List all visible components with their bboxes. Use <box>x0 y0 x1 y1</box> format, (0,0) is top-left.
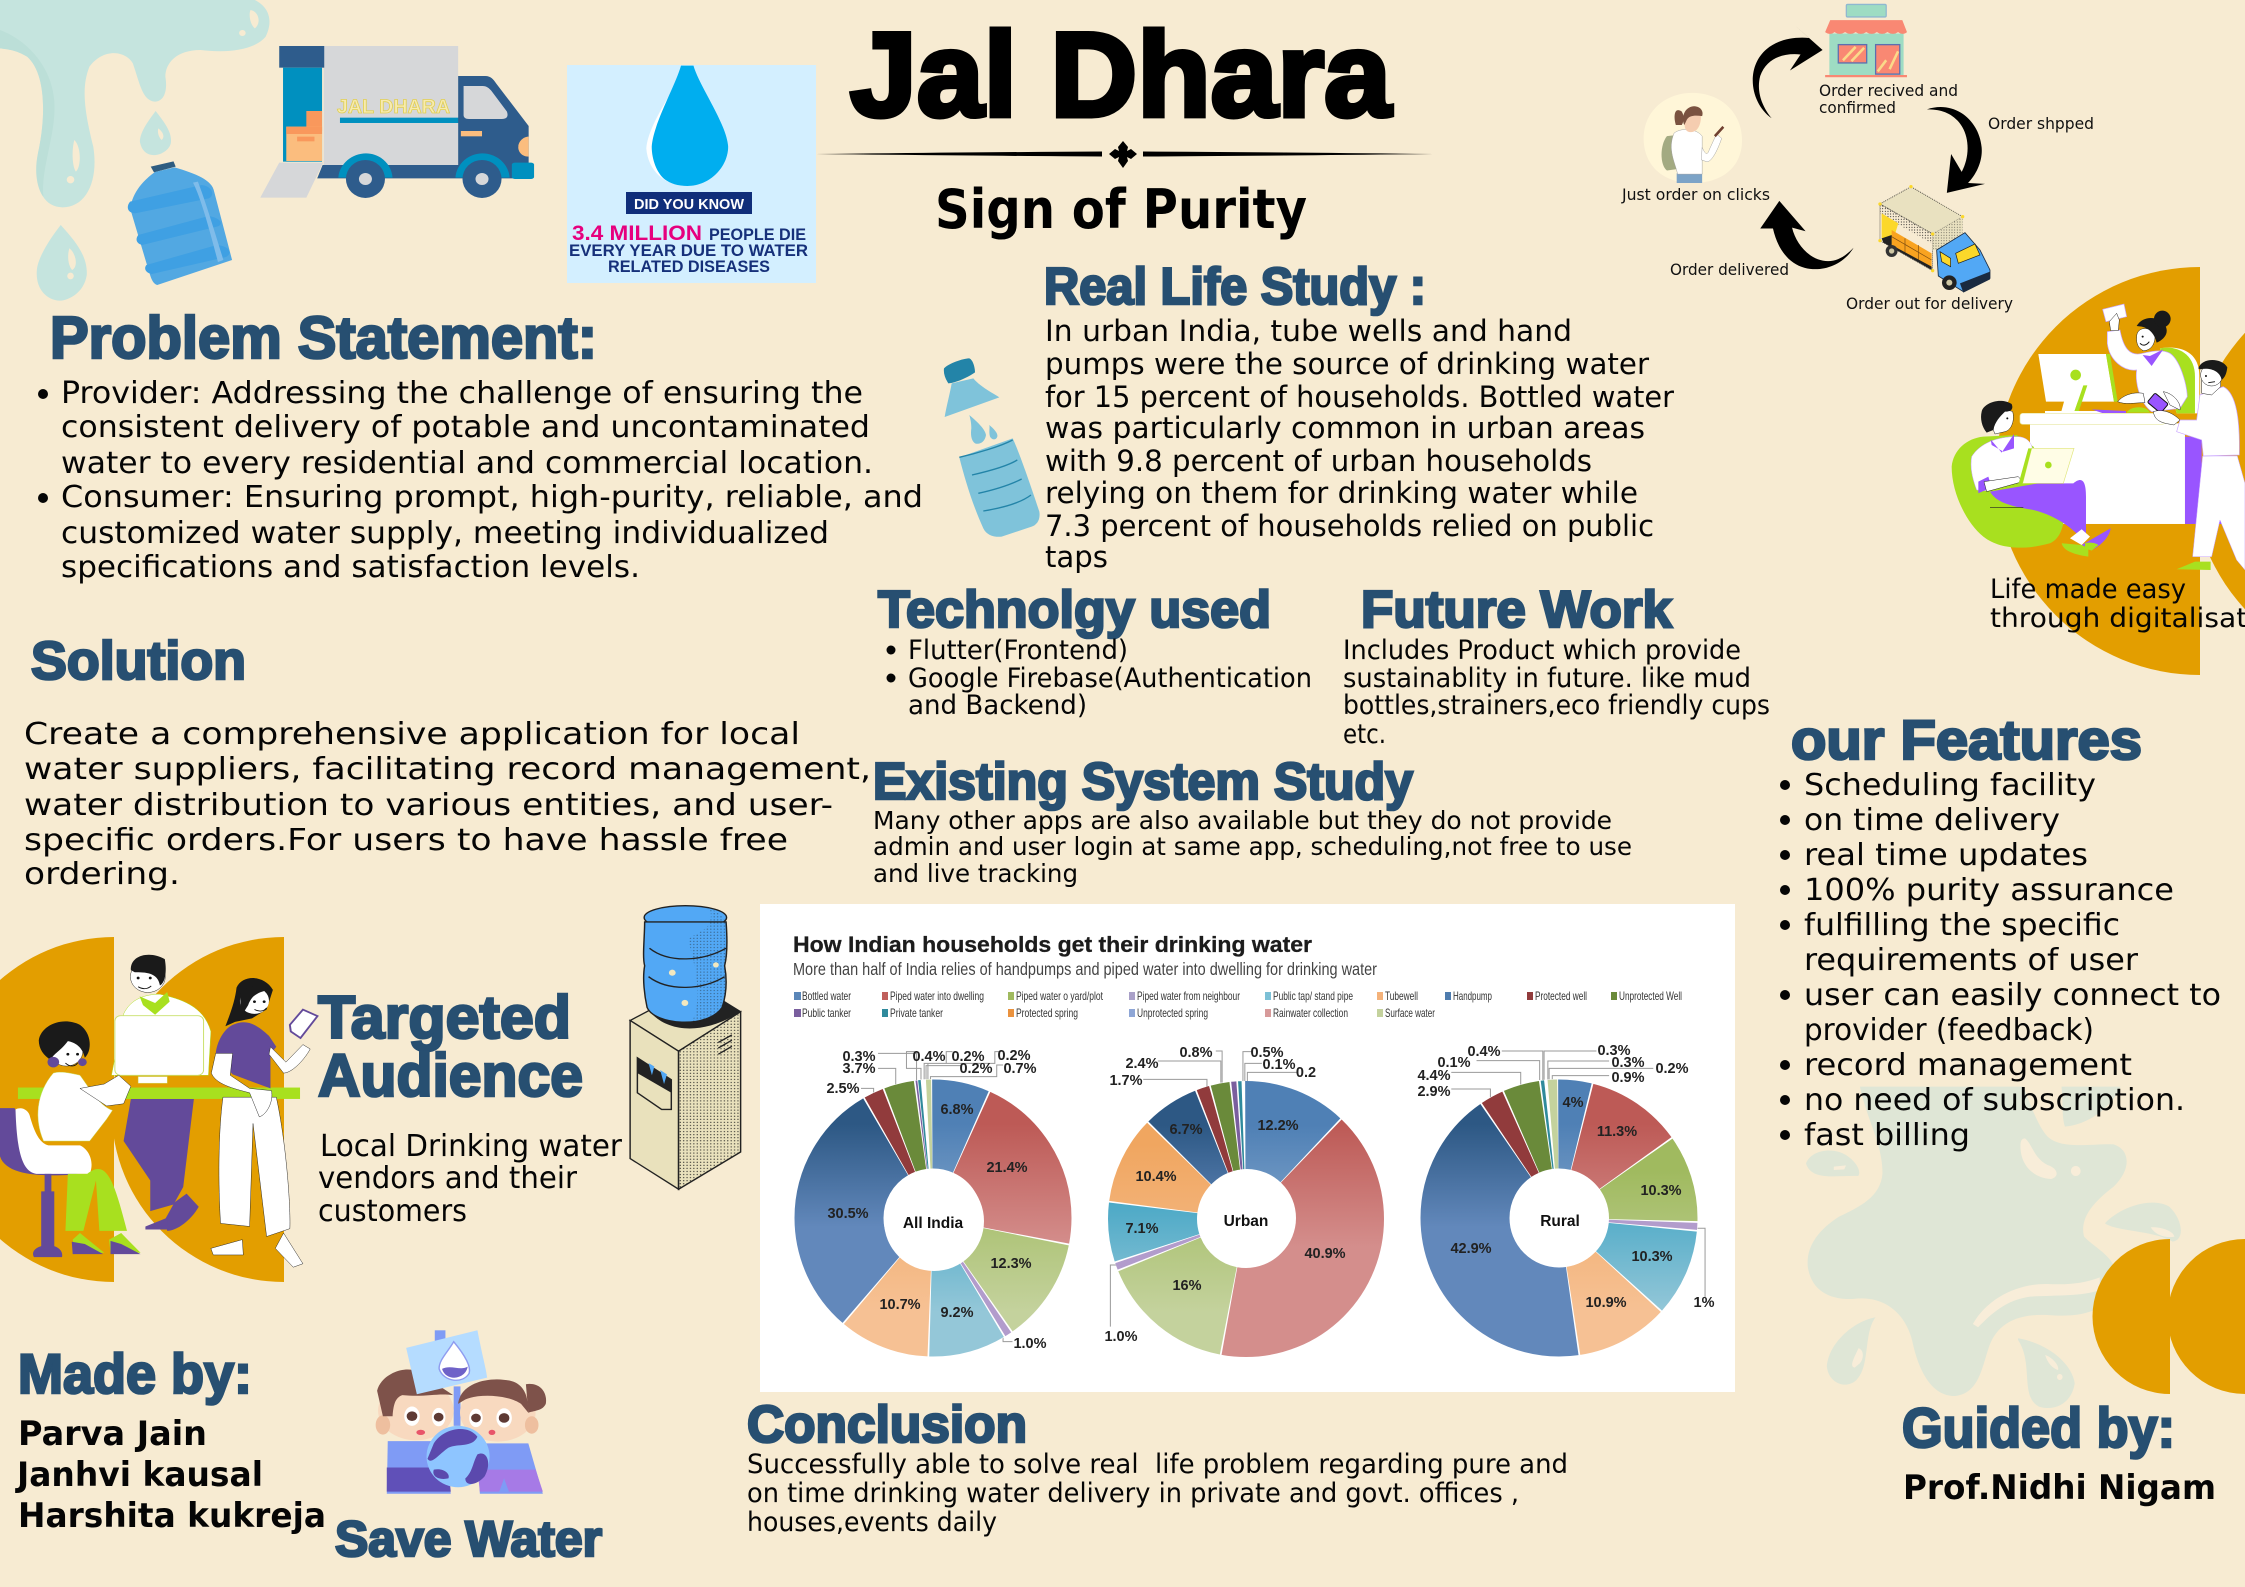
heading <box>318 984 583 1109</box>
order flow diagram <box>1621 4 2094 313</box>
legend: Protected spring <box>1016 1006 1078 1020</box>
heading: Existing System Study <box>873 753 1413 811</box>
panel: existing system study <box>873 753 1632 888</box>
panel: targeted audience <box>318 984 623 1229</box>
legend: Piped water o yard/plot <box>1016 989 1103 1003</box>
body text <box>873 806 1632 888</box>
body text: and live tracking <box>873 859 1078 888</box>
panel: real life study <box>1044 258 1674 574</box>
step labels <box>1621 81 2094 313</box>
pie centre labels <box>903 1213 1580 1232</box>
heading: our Features <box>1791 708 2142 771</box>
did you know card <box>567 65 816 283</box>
body text: specific orders.For users to have hassle free <box>24 823 788 858</box>
water splash top left <box>0 0 269 301</box>
body text: Local Drinking water <box>320 1129 623 1164</box>
heading: Future Work <box>1361 581 1672 639</box>
legend: Unprotected Well <box>1619 989 1682 1003</box>
body text: relying on them for drinking water while <box>1045 476 1638 510</box>
body text: Many other apps are also available but they do not provide <box>873 806 1612 835</box>
data labels: 0.2 <box>1296 1065 1316 1081</box>
legend: Surface water <box>1385 1006 1435 1020</box>
data labels: 6.7% <box>1169 1122 1203 1138</box>
data labels: 1% <box>1694 1295 1715 1311</box>
body text: Successfully able to solve real life problem regarding pure and <box>747 1449 1568 1480</box>
data labels: 0.3% <box>1611 1055 1645 1071</box>
statistic text: PEOPLE DIE <box>709 225 806 244</box>
data labels: 6.8% <box>940 1102 974 1118</box>
body text: pumps were the source of drinking water <box>1045 347 1649 381</box>
body text: taps <box>1045 540 1108 574</box>
pie centre labels: All India <box>903 1215 964 1232</box>
icon: woman ordering by phone <box>1644 93 1742 183</box>
statistic text: EVERY YEAR DUE TO WATER <box>569 241 808 260</box>
chart subtitle: More than half of India relies of handpumps and piped water into dwelling for drinking water <box>793 959 1377 979</box>
panel: solution <box>24 631 871 892</box>
bullet list: real time updates <box>1804 838 2088 873</box>
bullet list: provider (feedback) <box>1804 1013 2094 1048</box>
legend: Private tanker <box>890 1006 943 1020</box>
woman at desk <box>2107 330 2187 412</box>
bullet list: requirements of user <box>1804 943 2139 978</box>
data labels: 10.3% <box>1631 1249 1673 1265</box>
data labels: 12.3% <box>990 1256 1032 1272</box>
bullet list: water to every residential and commercial location. <box>61 446 873 481</box>
icon: water cooler <box>630 906 741 1189</box>
data labels: 11.3% <box>1597 1124 1637 1140</box>
bullet list <box>1780 768 2221 1153</box>
heading: Made by: <box>18 1342 252 1405</box>
data labels: 10.9% <box>1585 1295 1627 1311</box>
step labels: Order delivered <box>1670 260 1789 279</box>
heading: Conclusion <box>747 1396 1027 1454</box>
body text: ordering. <box>24 857 180 892</box>
icon: shop <box>1825 4 1907 77</box>
data labels: 0.7% <box>1003 1061 1037 1077</box>
icon: delivery truck <box>260 46 534 198</box>
data labels: 30.5% <box>827 1206 869 1222</box>
bullet list: Flutter(Frontend) <box>908 635 1128 666</box>
statistic text: RELATED DISEASES <box>608 257 770 276</box>
data labels: 9.2% <box>940 1305 974 1321</box>
panel: conclusion <box>747 1396 1568 1538</box>
man on beanbag <box>1952 435 2064 548</box>
legend: Protected well <box>1535 989 1587 1003</box>
step labels: Just order on clicks <box>1621 185 1770 204</box>
orange half discs bottom right <box>2092 1239 2245 1394</box>
pie: rural <box>1420 1079 1698 1357</box>
bullet list: consistent delivery of potable and uncontaminated <box>61 410 870 445</box>
heading: Real Life Study : <box>1044 258 1426 316</box>
data labels: 10.7% <box>879 1297 921 1313</box>
data labels: 0.2% <box>997 1048 1031 1064</box>
team names: Janhvi kausal <box>15 1455 263 1495</box>
body text <box>747 1449 1568 1538</box>
seated woman <box>0 1108 90 1175</box>
icon: loaded truck <box>1878 185 1990 293</box>
bullet list: Consumer: Ensuring prompt, high-purity, reliable, and <box>61 480 923 515</box>
data labels: 1.0% <box>1013 1336 1047 1352</box>
arrows <box>1753 26 1985 269</box>
panel: future work <box>1343 581 1770 750</box>
data labels: 16% <box>1172 1278 1202 1294</box>
panel: problem statement <box>38 305 923 585</box>
statistic text <box>569 222 808 276</box>
body text <box>1343 635 1770 750</box>
legend: Bottled water <box>802 989 851 1003</box>
panel: our features <box>1780 708 2221 1153</box>
bullet list: Provider: Addressing the challenge of ensuring the <box>61 376 863 411</box>
data labels: 0.2% <box>959 1061 993 1077</box>
caption: Life made easy <box>1990 574 2186 605</box>
data labels: 0.8% <box>1179 1045 1213 1061</box>
bullet list: Google Firebase(Authentication <box>908 663 1312 694</box>
body text: was particularly common in urban areas <box>1045 411 1645 445</box>
data labels: 4% <box>1563 1095 1584 1111</box>
step labels: Order recived and <box>1819 81 1958 100</box>
panel: made by <box>15 1342 326 1536</box>
standing man <box>111 994 211 1075</box>
body text: vendors and their <box>318 1161 578 1196</box>
bullet list <box>38 376 923 585</box>
data labels: 40.9% <box>1304 1246 1346 1262</box>
data labels: 0.2% <box>1655 1061 1689 1077</box>
pie centre labels: Urban <box>1224 1213 1268 1230</box>
data labels: 0.4% <box>1467 1044 1501 1060</box>
body text: water suppliers, facilitating record management, <box>24 752 871 787</box>
panel: chart <box>760 904 1735 1392</box>
body text: customers <box>318 1194 467 1229</box>
legend: Tubewell <box>1385 989 1418 1003</box>
data labels: 12.2% <box>1257 1118 1299 1134</box>
body text: for 15 percent of households. Bottled water <box>1045 380 1674 414</box>
guide name: Prof.Nidhi Nigam <box>1903 1468 2216 1508</box>
body text: Includes Product which provide <box>1343 635 1741 666</box>
team names: Parva Jain <box>18 1414 207 1454</box>
body text: sustainablity in future. like mud <box>1343 663 1751 694</box>
divider ornament <box>816 141 1433 168</box>
heading: Guided by: <box>1902 1396 2175 1459</box>
title: Jal Dhara <box>850 8 1392 142</box>
icon: delivery truck: JAL DHARA <box>337 97 450 118</box>
body text: on time drinking water delivery in private and govt. offices , <box>747 1478 1519 1509</box>
icon: kids holding globe <box>376 1330 546 1494</box>
data labels: 3.7% <box>842 1061 876 1077</box>
step labels: Order out for delivery <box>1846 294 2013 313</box>
data labels <box>826 1043 1715 1352</box>
banner: did you know <box>626 192 752 214</box>
data labels: 0.2% <box>951 1049 985 1065</box>
heading: Targeted <box>318 984 571 1051</box>
body text <box>1045 314 1674 574</box>
data labels: 0.1% <box>1437 1055 1471 1071</box>
banner: did you know: DID YOU KNOW <box>634 196 745 213</box>
pie: urban <box>1108 1081 1384 1357</box>
bullet list: Scheduling facility <box>1804 768 2096 803</box>
data labels: 1.7% <box>1109 1073 1143 1089</box>
data labels: 0.1% <box>1262 1057 1296 1073</box>
data labels: 0.3% <box>1597 1043 1631 1059</box>
body text: etc. <box>1343 719 1386 750</box>
data labels: 0.4% <box>912 1049 946 1065</box>
body text: 7.3 percent of households relied on public <box>1045 509 1654 543</box>
icon: water can <box>128 161 232 285</box>
data labels: 2.9% <box>1417 1084 1451 1100</box>
heading: Solution <box>31 631 246 691</box>
legend: Unprotected spring <box>1137 1006 1208 1020</box>
data labels: 10.4% <box>1135 1169 1177 1185</box>
leader lines <box>861 1051 1705 1342</box>
bullet list: and Backend) <box>908 690 1087 721</box>
team names <box>15 1414 326 1536</box>
body text: admin and user login at same app, scheduling,not free to use <box>873 832 1632 861</box>
bullet list: record management <box>1804 1048 2132 1083</box>
data labels: 4.4% <box>1417 1068 1451 1084</box>
bullet list: user can easily connect to <box>1804 978 2221 1013</box>
data labels: 21.4% <box>986 1160 1028 1176</box>
data labels: 10.3% <box>1640 1183 1682 1199</box>
bullet list: on time delivery <box>1804 803 2060 838</box>
standing woman <box>219 1097 290 1237</box>
water splash bottom right <box>1806 1087 2181 1408</box>
heading: Technolgy used <box>878 581 1271 639</box>
body text <box>318 1129 623 1229</box>
data labels: 0.5% <box>1250 1045 1284 1061</box>
bullet list: no need of subscription. <box>1804 1083 2185 1118</box>
data labels: 0.3% <box>842 1049 876 1065</box>
caption: save water: Save Water <box>335 1511 602 1567</box>
legend: Public tap/ stand pipe <box>1273 989 1353 1003</box>
bullet list: fulfilling the specific <box>1804 908 2120 943</box>
legend <box>794 989 1682 1020</box>
data labels: 2.5% <box>826 1081 860 1097</box>
pie centre labels: Rural <box>1540 1213 1580 1230</box>
body text: bottles,strainers,eco friendly cups <box>1343 690 1770 721</box>
body text: Create a comprehensive application for local <box>24 717 800 752</box>
body text: In urban India, tube wells and hand <box>1045 314 1572 348</box>
icon: plastic bottle <box>944 358 1040 537</box>
chart title: How Indian households get their drinking water <box>793 932 1312 957</box>
body text: houses,events daily <box>747 1507 997 1538</box>
man standing <box>2193 456 2245 570</box>
bullet list: specifications and satisfaction levels. <box>61 550 640 585</box>
step labels: Order shpped <box>1988 114 2094 133</box>
heading: Problem Statement: <box>50 305 597 371</box>
statistic text: 3.4 MILLION <box>572 222 702 245</box>
data labels: 7.1% <box>1125 1221 1159 1237</box>
legend: Handpump <box>1453 989 1492 1003</box>
illustration: target audience group <box>0 937 317 1282</box>
data labels: 1.0% <box>1104 1329 1138 1345</box>
caption <box>1990 574 2245 634</box>
data labels: 42.9% <box>1450 1241 1492 1257</box>
data labels: 0.9% <box>1611 1070 1645 1086</box>
panel: guided by <box>1902 1396 2216 1508</box>
legend: Piped water into dwelling <box>890 989 984 1003</box>
bullet list: customized water supply, meeting individualized <box>61 516 829 551</box>
icon: water drop <box>646 66 728 186</box>
legend: Public tanker <box>802 1006 851 1020</box>
step labels: confirmed <box>1819 98 1896 117</box>
bullet list: fast billing <box>1804 1118 1970 1153</box>
bullet list <box>886 635 1312 721</box>
body text: water distribution to various entities, and user- <box>24 788 833 823</box>
heading: Audience <box>318 1042 583 1109</box>
team names: Harshita kukreja <box>18 1496 326 1536</box>
panel: technology used <box>878 581 1312 721</box>
illustration: digital office team <box>1952 267 2245 675</box>
pie: all india <box>794 1079 1072 1357</box>
body text: with 9.8 percent of urban households <box>1045 444 1592 478</box>
subtitle: Sign of Purity <box>935 178 1307 241</box>
bullet list: 100% purity assurance <box>1804 873 2174 908</box>
legend: Piped water from neighbour <box>1137 989 1240 1003</box>
data labels: 2.4% <box>1125 1056 1159 1072</box>
legend: Rainwater collection <box>1273 1006 1348 1020</box>
body text <box>24 717 871 892</box>
